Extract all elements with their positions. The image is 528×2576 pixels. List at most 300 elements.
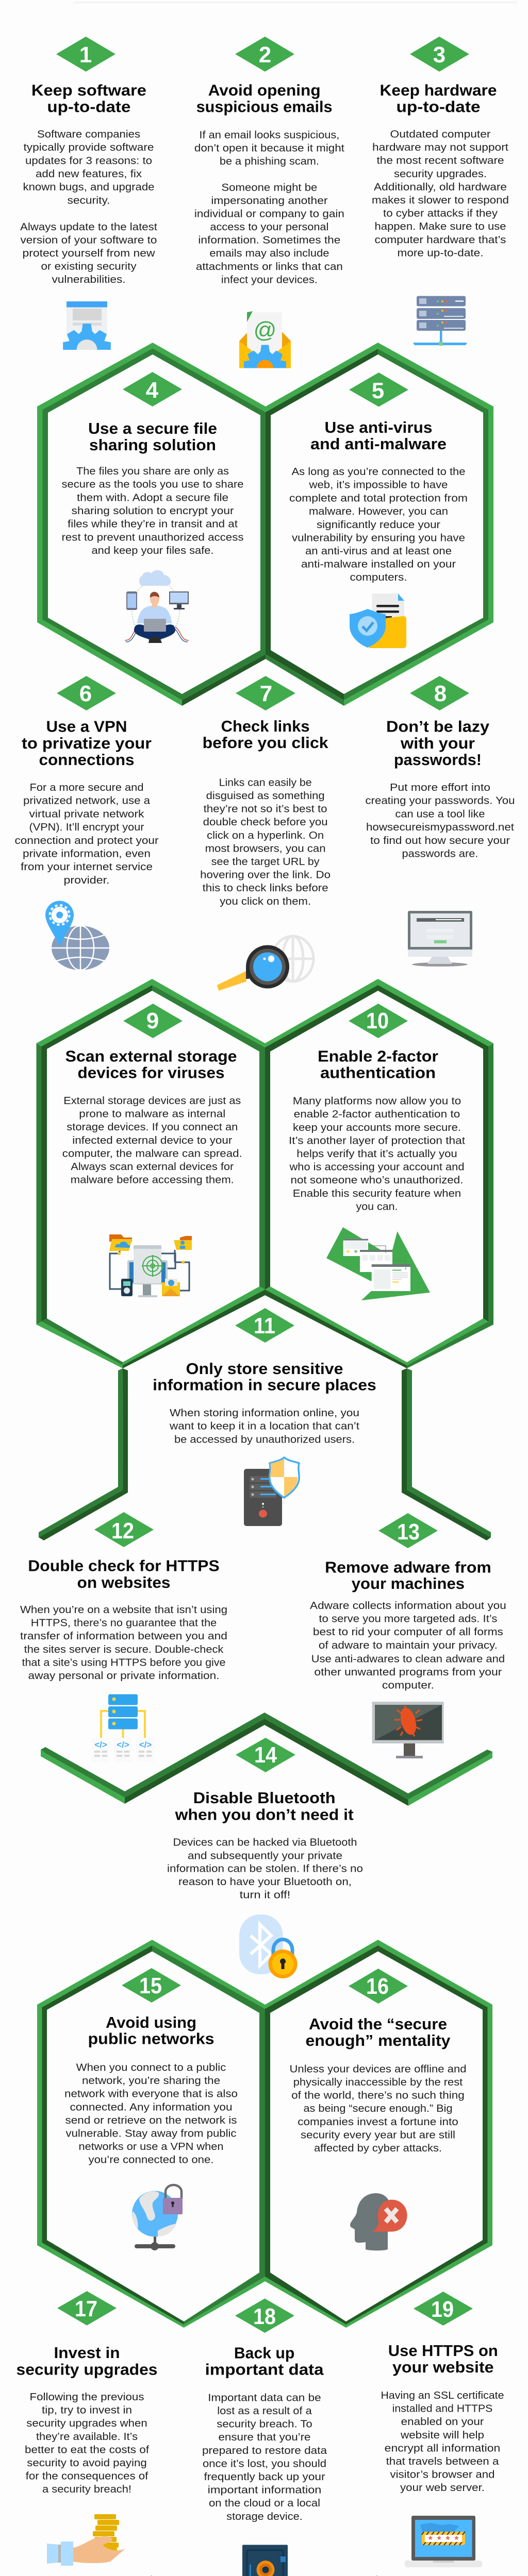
body text tip 18: Important data can be xyxy=(208,2392,321,2403)
body text tip 11: want to keep it in a location that can’t xyxy=(169,1421,359,1432)
heading tip 2: suspicious emails xyxy=(196,98,333,115)
body text tip 9: storage devices. If you connect an xyxy=(67,1122,238,1133)
panel: tip 4 secure file sharing xyxy=(62,372,243,643)
body text tip 14: Devices can be hacked via Bluetooth xyxy=(173,1837,357,1849)
body text tip 2: impersonating another xyxy=(211,195,328,207)
heading tip 13: Remove adware from xyxy=(325,1558,491,1577)
body text tip 4: The files you share are only as xyxy=(76,466,229,477)
body text tip 19: visitor’s browser and xyxy=(390,2469,495,2481)
heading tip 7: before you click xyxy=(203,734,328,752)
body text tip 18: prepared to restore data xyxy=(202,2445,327,2456)
panel: tip 12 double check HTTPS xyxy=(20,1512,227,1762)
heading tip 6 xyxy=(22,718,152,769)
body text tip 9: Always scan external devices for xyxy=(71,1161,234,1173)
body text tip 5: significantly reduce your xyxy=(317,519,440,531)
heading tip 13 xyxy=(325,1558,491,1592)
icon: email envelope with gear: @ xyxy=(254,317,276,343)
body text tip 3: hardware may not support xyxy=(372,142,509,154)
body text tip 2: access to your personal xyxy=(210,222,328,233)
body text tip 9 xyxy=(62,1095,242,1186)
body text tip 11 xyxy=(169,1408,359,1445)
body text tip 15: send or retrieve on the network is xyxy=(65,2115,237,2126)
body text tip 18: lost as a result of a xyxy=(217,2405,312,2417)
icon: server connected to code pages: </> xyxy=(94,1740,107,1750)
body text tip 16 xyxy=(290,2063,466,2154)
icon: software window with gear xyxy=(63,301,111,350)
panel: tip 2 avoid opening suspicious emails xyxy=(194,37,344,368)
body text tip 19: installed and HTTPS xyxy=(392,2403,492,2415)
body text tip 18 xyxy=(202,2392,327,2522)
body text tip 7: most browsers, you can xyxy=(205,843,326,854)
icon: monitor with login form xyxy=(408,911,472,967)
body text tip 17: security to avoid paying xyxy=(27,2458,147,2469)
heading tip 1 xyxy=(31,81,146,115)
body text tip 6: (VPN). It’ll encrypt your xyxy=(29,822,144,833)
body text tip 8: to find out how secure your xyxy=(370,835,510,846)
frame: hexagon pair for tips 4 and 5 xyxy=(37,343,493,706)
number badge 11 xyxy=(235,1308,294,1343)
frame: open-bottom pair for tips 20 and 21 xyxy=(36,2575,492,2576)
body text tip 3: more up-to-date. xyxy=(397,247,484,259)
icon: laptop with password field xyxy=(405,2516,482,2567)
heading tip 17 xyxy=(16,2344,158,2378)
panel: tip 13 remove adware xyxy=(310,1513,506,1758)
body text tip 4: secure as the tools you use to share xyxy=(62,479,243,490)
body text tip 17: they’re available. It’s xyxy=(36,2431,138,2443)
body text tip 7: see the target URL by xyxy=(211,856,320,868)
body text tip 3: Outdated computer xyxy=(390,129,491,140)
body text tip 1: version of your software to xyxy=(21,235,157,246)
body text tip 3: computer hardware that’s xyxy=(374,234,506,246)
heading tip 15: public networks xyxy=(88,2030,214,2048)
heading tip 8: with your xyxy=(400,734,475,752)
body text tip 17: security upgrades when xyxy=(26,2418,147,2429)
icon: server connected to code pages: </> xyxy=(117,1740,129,1750)
body text tip 1 xyxy=(20,129,157,285)
body text tip 3 xyxy=(372,129,509,259)
body text tip 19: that travels between a xyxy=(386,2456,499,2467)
icon: server connected to code pages xyxy=(92,1694,155,1762)
body text tip 6: from your internet service xyxy=(21,861,153,873)
body text tip 16: security every year but are still xyxy=(301,2129,455,2141)
body text tip 8: passwords are. xyxy=(402,848,478,859)
icon: email envelope with gear xyxy=(239,311,291,368)
body text tip 1: updates for 3 reasons: to xyxy=(25,155,152,166)
body text tip 10: Many platforms now allow you to xyxy=(293,1096,461,1107)
number badge 15: 15 xyxy=(139,1973,162,1998)
heading tip 9: devices for viruses xyxy=(77,1064,225,1082)
body text tip 3: the most recent software xyxy=(376,155,504,166)
body text tip 6: provider. xyxy=(64,875,109,886)
body text tip 6: connection and protect your xyxy=(14,835,159,846)
heading tip 7 xyxy=(203,717,328,752)
body text tip 10: you can. xyxy=(356,1201,398,1212)
icon: monitor with bug xyxy=(372,1702,444,1758)
body text tip 19: enabled on your xyxy=(401,2416,484,2428)
number badge 1: 1 xyxy=(79,42,92,67)
body text tip 19 xyxy=(381,2390,504,2494)
number badge 3 xyxy=(410,37,469,72)
heading tip 18 xyxy=(205,2344,324,2379)
number badge 16 xyxy=(349,1969,408,2004)
number badge 14 xyxy=(236,1738,295,1772)
panel: tip 7 check links xyxy=(200,676,331,991)
number badge 11: 11 xyxy=(254,1313,275,1338)
body text tip 18: storage device. xyxy=(226,2511,303,2522)
body text tip 2: individual or company to gain xyxy=(194,208,344,219)
body text tip 12: that a site’s using HTTPS before you give xyxy=(22,1657,226,1668)
number badge 13 xyxy=(378,1513,438,1548)
panel: tip 15 avoid public networks xyxy=(64,1968,238,2250)
body text tip 15: When you connect to a public xyxy=(76,2062,226,2073)
heading tip 18: important data xyxy=(205,2361,324,2379)
number badge 9 xyxy=(123,1004,183,1038)
body text tip 8: creating your passwords. You xyxy=(365,795,515,807)
panel: tip 5 anti-virus and anti-malware xyxy=(289,372,468,648)
body text tip 2: emails may also include xyxy=(209,248,329,259)
body text tip 9: External storage devices are just as xyxy=(63,1095,241,1107)
body text tip 11: When storing information online, you xyxy=(170,1408,359,1419)
body text tip 2: be a phishing scam. xyxy=(220,156,319,167)
number badge 7: 7 xyxy=(260,681,272,706)
heading tip 2 xyxy=(196,81,333,115)
heading tip 11 xyxy=(153,1360,376,1394)
icon: person with laptop, cloud and devices xyxy=(125,570,189,643)
heading tip 8 xyxy=(386,718,490,769)
icon: server connected to code pages: </> xyxy=(139,1740,152,1750)
body text tip 6: privatized network, use a xyxy=(23,795,151,807)
panel: tip 11 store sensitive information xyxy=(153,1308,376,1526)
number badge 16: 16 xyxy=(366,1974,389,1999)
number badge 7 xyxy=(236,676,295,710)
body text tip 15: vulnerable. Stay away from public xyxy=(66,2128,236,2139)
number badge 12: 12 xyxy=(111,1518,134,1544)
number badge 17: 17 xyxy=(75,2296,97,2321)
number badge 4: 4 xyxy=(146,378,159,403)
body text tip 1: security. xyxy=(67,195,110,206)
number badge 15 xyxy=(122,1968,181,2003)
heading tip 1: up-to-date xyxy=(47,98,130,115)
icon: magnifying glass over globe xyxy=(217,936,314,991)
body text tip 6: virtual private network xyxy=(29,808,145,820)
body text tip 19: encrypt all information xyxy=(385,2443,500,2454)
heading tip 5: and anti-malware xyxy=(310,435,447,453)
body text tip 7: disguised as something xyxy=(206,790,325,802)
heading tip 1: Keep software xyxy=(31,81,146,99)
body text tip 18: once it’s lost, you should xyxy=(203,2458,326,2469)
icon: head with red X bubble xyxy=(350,2193,407,2250)
heading tip 10: Enable 2-factor xyxy=(318,1047,438,1065)
panel: tip 8 passwords xyxy=(365,676,515,967)
body text tip 1: protect yourself from new xyxy=(23,248,155,259)
panel: tip 1 keep software up-to-date xyxy=(20,37,157,350)
number badge 14: 14 xyxy=(254,1742,277,1768)
body text tip 17: a security breach! xyxy=(42,2484,131,2495)
body text tip 2: attachments or links that can xyxy=(196,261,343,273)
body text tip 5: an anti-virus and at least one xyxy=(305,546,452,557)
body text tip 16: companies invest a fortune into xyxy=(298,2116,458,2128)
panel: tip 10 two-factor authentication xyxy=(289,1004,466,1300)
body text tip 18: on the cloud or a local xyxy=(209,2498,320,2509)
body text tip 13: Use anti-adwares to clean adware and xyxy=(311,1654,505,1665)
body text tip 13: best to rid your computer of all forms xyxy=(313,1626,503,1638)
body text tip 5: vulnerability by ensuring you have xyxy=(292,533,465,544)
icon: green arrows and browser windows xyxy=(326,1227,430,1300)
body text tip 10: It’s another layer of protection that xyxy=(289,1135,466,1146)
body text tip 14: reason to have your Bluetooth on, xyxy=(178,1876,352,1888)
body text tip 12: away personal or private information. xyxy=(28,1670,220,1682)
body text tip 17: for the consequences of xyxy=(26,2471,148,2482)
panel: tip 18 back up important data xyxy=(202,2298,327,2576)
body text tip 2: don’t open it because it might xyxy=(194,143,344,154)
heading tip 3: up-to-date xyxy=(396,98,481,115)
number badge 6: 6 xyxy=(79,681,92,706)
body text tip 10: enable 2-factor authentication to xyxy=(294,1109,460,1120)
number badge 12 xyxy=(94,1512,154,1547)
number badge 2: 2 xyxy=(259,42,271,67)
body text tip 7: hovering over the link. Do xyxy=(200,870,331,881)
number badge 19: 19 xyxy=(431,2297,454,2322)
heading tip 5: Use anti-virus xyxy=(325,418,432,436)
body text tip 12 xyxy=(20,1604,227,1682)
heading tip 2: Avoid opening xyxy=(208,81,321,99)
body text tip 19: Having an SSL certificate xyxy=(381,2390,504,2401)
body text tip 4: rest to prevent unauthorized access xyxy=(62,532,243,543)
body text tip 15: networks or use a VPN when xyxy=(78,2141,224,2153)
body text tip 15 xyxy=(64,2062,238,2166)
heading tip 16 xyxy=(305,2015,451,2049)
body text tip 16: physically inaccessible by the rest xyxy=(293,2077,463,2088)
frame: zigzag above tip 14 xyxy=(41,1713,492,1806)
body text tip 12: HTTPS, there’s no guarantee that the xyxy=(31,1618,217,1629)
body text tip 17: Following the previous xyxy=(30,2392,144,2403)
body text tip 5: anti-malware installed on your xyxy=(301,558,456,570)
body text tip 1: Software companies xyxy=(37,129,140,140)
body text tip 13: of adware to maintain your privacy. xyxy=(319,1640,498,1651)
body text tip 9: malware before accessing them. xyxy=(71,1175,234,1186)
body text tip 16: Unless your devices are offline and xyxy=(290,2063,466,2075)
body text tip 2: If an email looks suspicious, xyxy=(199,130,339,141)
body text tip 4: and keep your files safe. xyxy=(92,545,213,556)
heading tip 14 xyxy=(175,1789,354,1824)
number badge 5 xyxy=(349,372,408,407)
number badge 5: 5 xyxy=(372,378,384,403)
heading tip 10: authentication xyxy=(320,1064,436,1082)
body text tip 7: double check before you xyxy=(203,817,328,828)
panel: tip 19 use HTTPS on your website xyxy=(381,2292,504,2567)
heading tip 17: Invest in xyxy=(54,2344,120,2362)
body text tip 10: Enable this security feature when xyxy=(293,1188,461,1199)
heading tip 19 xyxy=(388,2342,498,2376)
icon: server rack xyxy=(413,296,467,346)
body text tip 10: who is accessing your account and xyxy=(289,1162,464,1173)
body text tip 13: computer. xyxy=(382,1680,434,1691)
body text tip 1: add new features, fix xyxy=(36,168,142,180)
panel: tip 14 disable Bluetooth xyxy=(167,1738,363,1978)
body text tip 5: complete and total protection from xyxy=(289,493,468,504)
icon: document, folder and shield xyxy=(350,594,406,648)
body text tip 5: malware. However, you can xyxy=(309,506,448,517)
body text tip 15: you’re connected to one. xyxy=(89,2155,213,2166)
number badge 6 xyxy=(57,676,116,710)
number badge 10 xyxy=(349,1004,408,1038)
icon: server tower and shield xyxy=(244,1458,299,1526)
number badge 1 xyxy=(56,37,116,72)
body text tip 5: web, it’s impossible to have xyxy=(308,480,448,491)
body text tip 4: files while they’re in transit and at xyxy=(68,519,238,530)
body text tip 13 xyxy=(310,1600,506,1691)
heading tip 9 xyxy=(65,1047,237,1082)
body text tip 13: other unwanted programs from your xyxy=(314,1667,502,1678)
heading tip 14: Disable Bluetooth xyxy=(193,1789,336,1807)
body text tip 7: this to check links before xyxy=(203,883,328,894)
number badge 2 xyxy=(235,37,294,72)
body text tip 7: Links can easily be xyxy=(219,777,312,788)
body text tip 6: private information, even xyxy=(23,848,151,859)
number badge 19 xyxy=(414,2292,473,2326)
body text tip 19: website will help xyxy=(400,2430,484,2441)
body text tip 1: Always update to the latest xyxy=(20,222,157,233)
number badge 4 xyxy=(123,372,182,406)
body text tip 15: connected. Any information you xyxy=(70,2102,232,2113)
body text tip 5: computers. xyxy=(350,572,407,583)
body text tip 10 xyxy=(289,1096,466,1212)
body text tip 16: of the world, there’s no such thing xyxy=(291,2090,465,2102)
heading tip 14: when you don’t need it xyxy=(175,1805,354,1824)
heading tip 4: Use a secure file xyxy=(88,419,217,437)
heading tip 12: Double check for HTTPS xyxy=(28,1557,220,1575)
number badge 18: 18 xyxy=(253,2304,276,2329)
heading tip 12: on websites xyxy=(77,1573,170,1591)
heading tip 11: Only store sensitive xyxy=(186,1360,343,1378)
body text tip 6 xyxy=(14,782,159,886)
body text tip 16: affected by cyber attacks. xyxy=(314,2143,442,2154)
body text tip 11: be accessed by unauthorized users. xyxy=(174,1434,355,1445)
heading tip 16: Avoid the “secure xyxy=(309,2015,447,2033)
body text tip 18: ensure that you’re xyxy=(219,2432,310,2443)
number badge 8: 8 xyxy=(434,681,447,706)
panel: tip 6 use a VPN xyxy=(14,676,159,970)
body text tip 14 xyxy=(167,1837,363,1901)
number badge 10: 10 xyxy=(366,1008,389,1033)
body text tip 7: click on a hyperlink. On xyxy=(207,830,324,841)
body text tip 7: they’re not so it’s best to xyxy=(204,804,327,815)
body text tip 8: Put more effort into xyxy=(390,782,490,793)
heading tip 12 xyxy=(28,1557,220,1591)
body text tip 3: to cyber attacks if they xyxy=(383,208,498,219)
body text tip 9: computer, the malware can spread. xyxy=(62,1148,242,1159)
heading tip 5 xyxy=(310,418,447,453)
body text tip 7: you click on them. xyxy=(220,896,311,907)
number badge 13: 13 xyxy=(397,1519,420,1545)
heading tip 6: to privatize your xyxy=(22,734,152,752)
body text tip 5 xyxy=(289,466,468,583)
body text tip 1: vulnerabilities. xyxy=(52,274,126,285)
heading tip 8: Don’t be lazy xyxy=(386,718,490,736)
heading tip 19: your website xyxy=(392,2358,494,2376)
body text tip 10: helps verify that it’s actually you xyxy=(296,1148,457,1160)
body text tip 18: important information xyxy=(208,2485,321,2496)
body text tip 3: makes it slower to respond xyxy=(372,195,509,206)
body text tip 12: transfer of information between you and xyxy=(20,1631,227,1642)
body text tip 13: Adware collects information about you xyxy=(310,1600,506,1612)
panel: tip 17 invest in security upgrades xyxy=(16,2291,158,2566)
body text tip 3: security upgrades. xyxy=(394,168,487,180)
body text tip 15: network with everyone that is also xyxy=(64,2089,238,2100)
heading tip 19: Use HTTPS on xyxy=(388,2342,498,2360)
body text tip 1: typically provide software xyxy=(24,142,154,154)
heading tip 11: information in secure places xyxy=(153,1376,376,1394)
icon: globe with padlock xyxy=(132,2185,183,2250)
frame: hexagon pair for tips 15 and 16 xyxy=(37,1940,492,2328)
icon: safe xyxy=(242,2545,288,2576)
body text tip 15: network, you’re sharing the xyxy=(82,2075,220,2087)
panel: tip 16 secure enough mentality xyxy=(290,1969,466,2250)
body text tip 14: information can be stolen. If there’s no xyxy=(167,1863,363,1874)
body text tip 17: better to eat the costs of xyxy=(25,2444,149,2455)
body text tip 4: them with. Adopt a secure file xyxy=(77,492,228,503)
body text tip 4: sharing solution to encrypt your xyxy=(71,505,234,517)
body text tip 1: or existing security xyxy=(41,261,136,272)
body text tip 19: your web server. xyxy=(400,2482,485,2494)
body text tip 17: tip, try to invest in xyxy=(42,2405,132,2416)
body text tip 8: howsecureismypassword.net xyxy=(366,822,514,833)
body text tip 12: When you’re on a website that isn’t using xyxy=(20,1604,227,1616)
body text tip 2: information. Sometimes the xyxy=(198,235,340,246)
number badge 9: 9 xyxy=(146,1008,159,1033)
heading tip 3: Keep hardware xyxy=(380,81,497,99)
body text tip 16: as being “secure enough.” Big xyxy=(303,2103,453,2114)
body text tip 9: prone to malware as internal xyxy=(79,1109,225,1120)
heading tip 4 xyxy=(88,419,217,454)
body text tip 2: infect your devices. xyxy=(221,274,318,285)
icon: hand holding stack of coins xyxy=(47,2514,126,2566)
body text tip 10: keep your accounts more secure. xyxy=(293,1122,461,1133)
heading tip 15: Avoid using xyxy=(106,2013,196,2031)
heading tip 16: enough” mentality xyxy=(305,2031,451,2049)
icon: Bluetooth symbol with padlock xyxy=(239,1914,297,1978)
panel: tip 3 keep hardware up-to-date xyxy=(372,37,509,346)
heading tip 15 xyxy=(88,2013,214,2048)
body text tip 14: and subsequently your private xyxy=(188,1851,342,1862)
number badge 17 xyxy=(57,2291,117,2326)
body text tip 3: happen. Make sure to use xyxy=(374,221,506,232)
heading tip 6: connections xyxy=(39,751,134,769)
number badge 8 xyxy=(410,676,469,710)
body text tip 18: frequently back up your xyxy=(204,2471,325,2483)
number badge 3: 3 xyxy=(433,42,446,67)
body text tip 5: As long as you’re connected to the xyxy=(292,466,465,478)
icon: laptop with password field: **** xyxy=(428,2535,459,2546)
body text tip 7 xyxy=(200,777,331,907)
heading tip 10 xyxy=(318,1047,438,1082)
heading tip 13: your machines xyxy=(352,1574,465,1592)
body text tip 14: turn it off! xyxy=(240,1890,290,1901)
heading tip 7: Check links xyxy=(221,717,310,735)
body text tip 18: security breach. To xyxy=(217,2419,312,2430)
body text tip 2 xyxy=(194,130,344,285)
heading tip 17: security upgrades xyxy=(16,2360,158,2378)
body text tip 4 xyxy=(62,466,243,556)
body text tip 8: can use a tool like xyxy=(395,808,485,820)
body text tip 9: infected external device to your xyxy=(72,1135,233,1146)
heading tip 8: passwords! xyxy=(394,751,482,769)
heading tip 4: sharing solution xyxy=(89,436,216,454)
icon: location pin and globe xyxy=(45,901,109,970)
body text tip 10: not someone who’s unauthorized. xyxy=(291,1175,463,1186)
body text tip 2: Someone might be xyxy=(221,182,317,194)
body text tip 12: the sites server is secure. Double-check xyxy=(24,1644,224,1655)
